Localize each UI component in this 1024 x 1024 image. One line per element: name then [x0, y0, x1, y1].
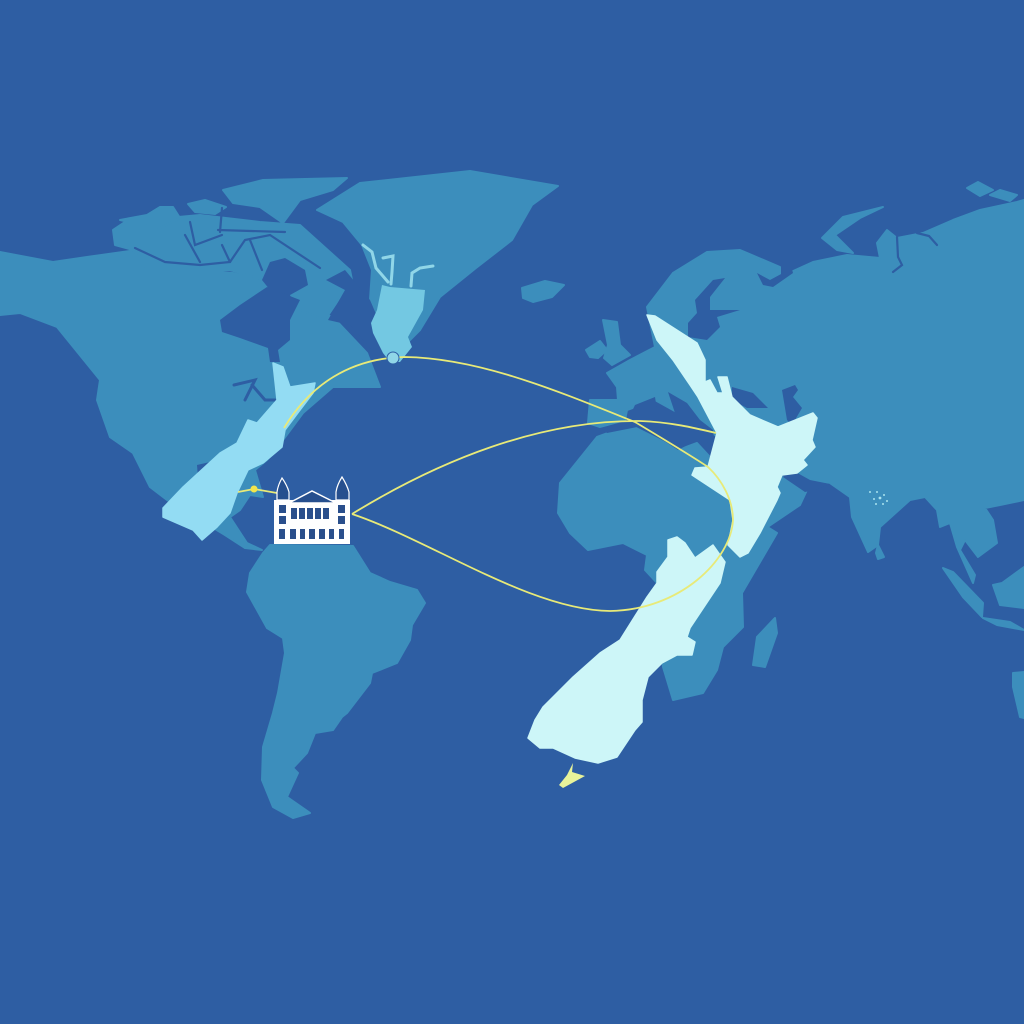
Greenland highlighted region [363, 245, 433, 362]
continent: Europe and Asia [588, 200, 1024, 583]
island: Madagascar [753, 618, 777, 667]
continent: South America [247, 545, 425, 818]
route: building to upper right region [352, 421, 716, 514]
small southern island [559, 763, 585, 788]
Caspian Sea [782, 385, 802, 425]
island: Novaya Zemlya [822, 207, 883, 253]
island: Arctic Siberia east [990, 190, 1017, 201]
pediment [289, 491, 336, 503]
Persian Gulf [783, 470, 830, 492]
highlighted land: lower right region [528, 537, 725, 763]
continent: North America [0, 250, 380, 550]
flight routes [238, 357, 733, 611]
inlets [363, 245, 433, 286]
island: Ellesmere [223, 178, 347, 223]
island: Great Britain [603, 320, 630, 365]
inland seas and channels [197, 258, 830, 492]
route: north to right region and back to building [284, 357, 733, 611]
island: Sri Lanka [876, 545, 884, 559]
Gulf of Mexico [197, 462, 216, 478]
Black Sea [732, 387, 768, 408]
highlighted land: upper right region [647, 315, 817, 557]
White Sea [757, 262, 793, 287]
left tower [277, 478, 289, 500]
Foxe Basin [262, 258, 308, 295]
region: Arabia [763, 477, 807, 530]
island: Borneo [993, 567, 1024, 608]
region: light blue land [371, 285, 425, 362]
route node [250, 486, 258, 492]
island: Ireland [586, 341, 607, 358]
icon: route node top [387, 352, 399, 364]
island: upper Arctic west [120, 207, 180, 228]
island: Iceland [522, 281, 564, 302]
Baffin strait [326, 270, 385, 350]
island: Sumatra [943, 568, 983, 617]
route: left connector [238, 489, 277, 493]
Siberian rivers [893, 237, 902, 272]
island: Australia edge [1013, 672, 1024, 718]
Arctic channels [135, 208, 320, 270]
island: small Arctic [188, 200, 226, 214]
world map continents [0, 171, 1024, 818]
icon: government building [274, 477, 350, 544]
upper windows [279, 505, 345, 524]
Mediterranean Sea [600, 392, 715, 450]
Baltic Sea [688, 278, 740, 340]
channels and rivers [135, 208, 937, 400]
continent: Greenland [317, 171, 558, 345]
lower windows [279, 529, 344, 539]
continent: Arctic archipelago [113, 215, 352, 320]
right tower [336, 477, 349, 500]
building body [274, 500, 350, 544]
highlighted land: left region [163, 363, 315, 540]
island: Java [983, 618, 1024, 630]
island: Arctic Siberia [967, 182, 993, 196]
speckled islands [869, 491, 888, 505]
Great Lakes [234, 380, 275, 400]
continent: Africa [558, 425, 777, 700]
Hudson Bay [220, 287, 300, 362]
